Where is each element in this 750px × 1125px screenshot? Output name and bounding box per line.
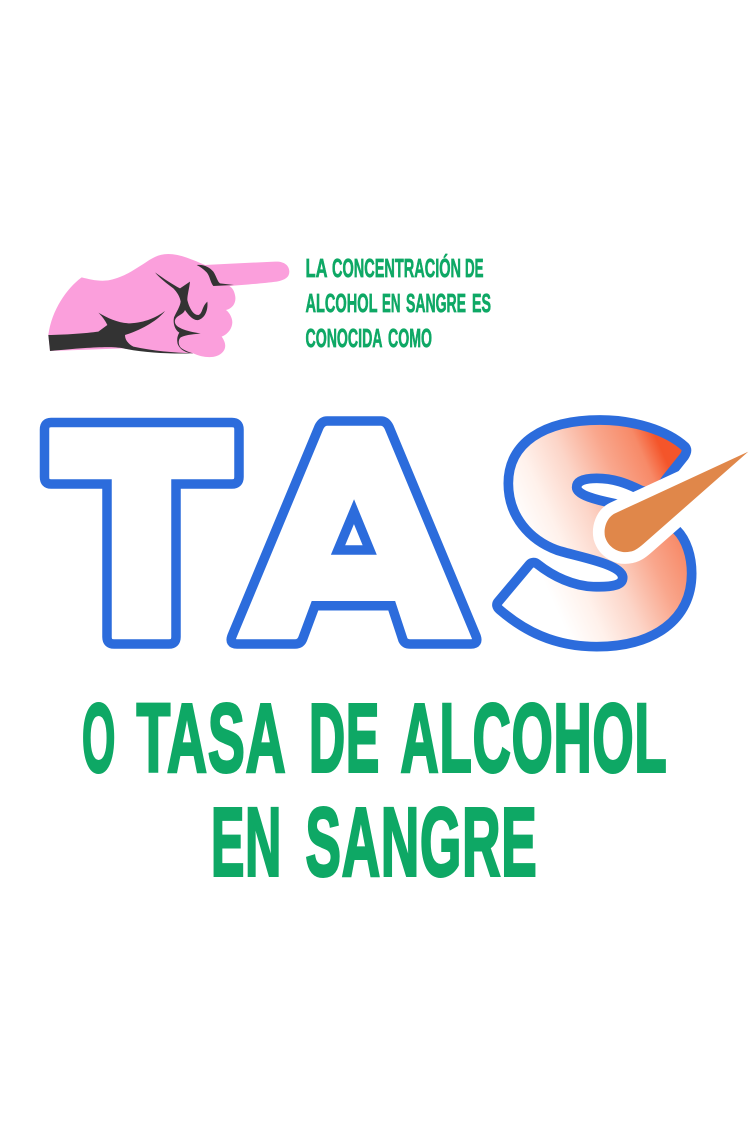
letter S: [497, 420, 692, 647]
text: intro sentence: CONCENTRACIÓN: [332, 253, 461, 283]
text: intro sentence: CONOCIDA: [306, 323, 383, 353]
letter T: [44, 422, 239, 644]
icon: gauge needle: [605, 452, 748, 552]
text: intro sentence: ES: [472, 288, 491, 318]
title: TAS: [44, 420, 692, 647]
text: intro sentence: COMO: [388, 323, 432, 353]
heading: full name of TAS: DE: [309, 684, 380, 792]
text: intro sentence: EN: [382, 288, 400, 318]
heading: full name of TAS: SANGRE: [306, 788, 538, 896]
icon: pointing hand: [48, 254, 289, 357]
text: intro sentence: SANGRE: [406, 288, 466, 318]
text: intro sentence: LA: [306, 253, 328, 283]
heading: full name of TAS: TASA: [136, 684, 286, 792]
heading: full name of TAS: [82, 684, 668, 896]
text: intro sentence: [306, 253, 491, 353]
text: intro sentence: ALCOHOL: [306, 288, 378, 318]
text: intro sentence: DE: [465, 253, 484, 283]
heading: full name of TAS: EN: [211, 788, 282, 896]
heading: full name of TAS: O: [82, 684, 116, 792]
letter A: [231, 421, 477, 644]
